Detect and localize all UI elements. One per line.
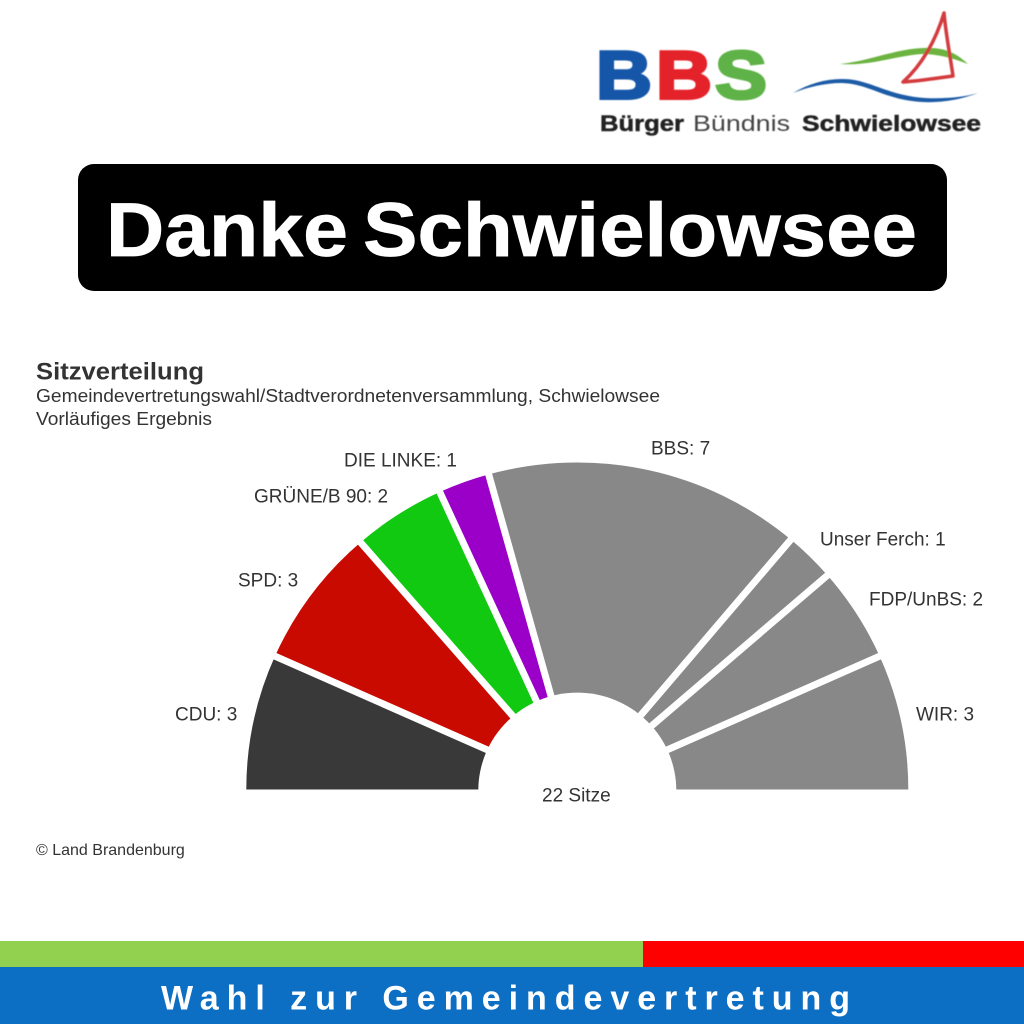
seat labels: GRÜNE/B 90: 2 [254, 486, 388, 508]
seat labels: Unser Ferch: 1 [820, 530, 946, 550]
title text: Schwielowsee [363, 188, 917, 273]
segment: CDU [246, 656, 577, 790]
footer text: Wahl zur Gemeindevertretung [161, 980, 850, 1018]
title banner [78, 164, 947, 291]
footer colour stripes [0, 941, 1024, 967]
segment: Unser Ferch [577, 540, 827, 790]
seat labels: CDU: 3 [175, 704, 237, 726]
result status: Vorläufiges Ergebnis [36, 409, 212, 429]
segment: GRÜNE/B 90 [360, 492, 577, 790]
segment: BBS [489, 462, 791, 790]
title text: Danke [106, 188, 348, 273]
chart heading: Sitzverteilung [36, 358, 204, 386]
logo letters BBS: S [715, 38, 767, 114]
seat labels: 22 Sitze [542, 786, 611, 806]
seat labels: FDP/UnBS: 2 [869, 590, 983, 610]
segment: DIE LINKE [440, 474, 577, 790]
chart heading [36, 358, 660, 429]
logo letters BBS [596, 38, 767, 114]
chart subtitle: Gemeindevertretungswahl/Stadtverordnetenversammlung, Schwielowsee [36, 386, 660, 406]
seat distribution semicircle chart [246, 462, 908, 790]
segment: FDP/UnBS [577, 575, 880, 790]
logo wordmark: Bürger [600, 111, 685, 136]
seat labels: WIR: 3 [916, 704, 974, 726]
copyright: © Land Brandenburg [36, 842, 185, 859]
seat labels: SPD: 3 [238, 570, 298, 592]
logo icon: hill, water and sail [793, 13, 978, 102]
title text [106, 188, 917, 273]
logo letters BBS: B [596, 38, 652, 114]
segment: SPD [275, 542, 577, 790]
logo wordmark: Schwielowsee [802, 111, 981, 136]
logo: Bürger Bündnis Schwielowsee [596, 13, 981, 136]
seat labels [175, 438, 983, 806]
logo wordmark [600, 111, 981, 136]
footer banner [0, 967, 1024, 1024]
seat labels: BBS: 7 [651, 438, 710, 460]
segment: WIR [577, 656, 908, 790]
logo wordmark: Bündnis [693, 111, 790, 136]
seat labels: DIE LINKE: 1 [344, 450, 457, 472]
logo letters BBS: B [656, 38, 712, 114]
